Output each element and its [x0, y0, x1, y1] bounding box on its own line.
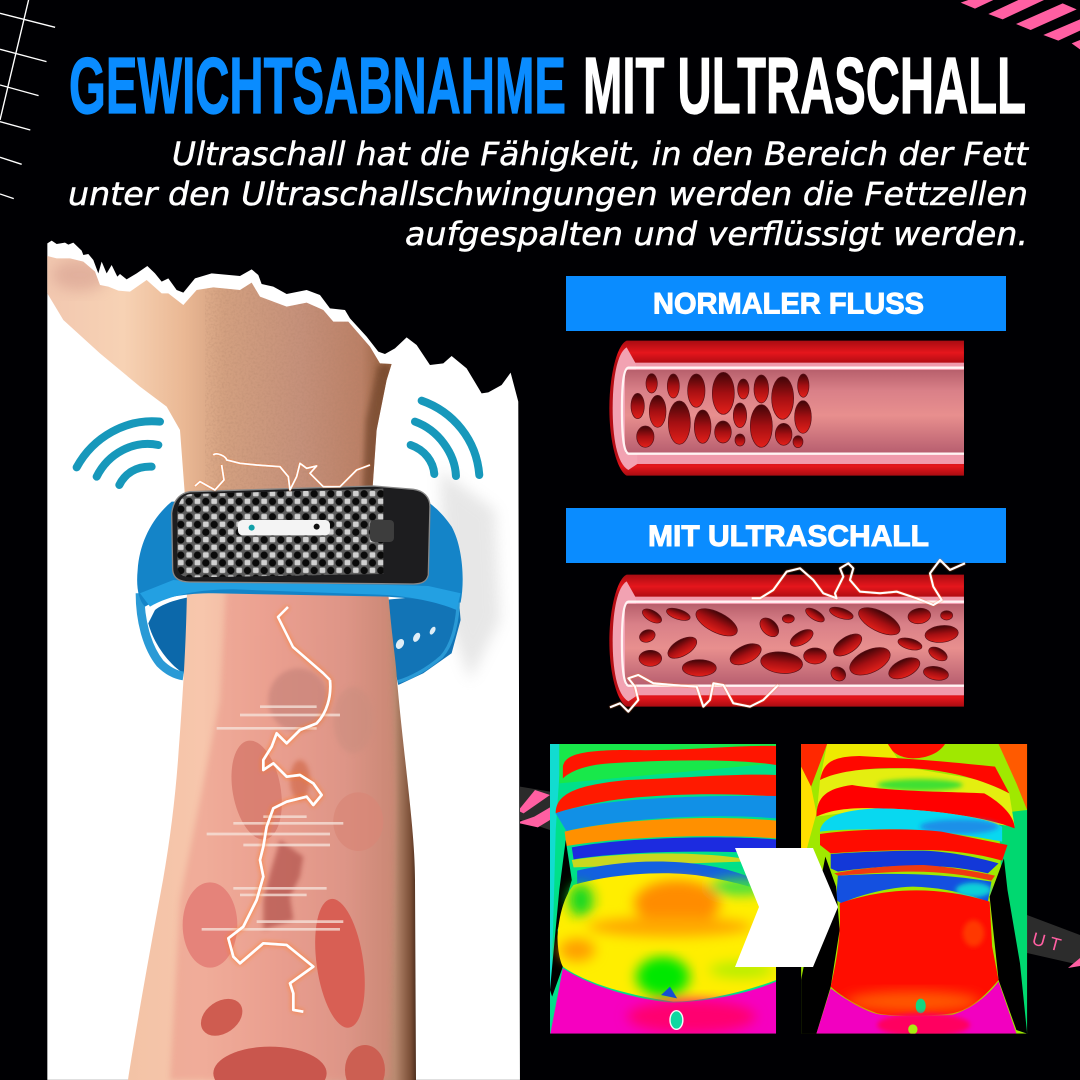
hip area [816, 982, 1016, 1034]
thermal image: after [801, 744, 1027, 1037]
lightning on forearm [228, 607, 330, 1012]
title: blue part: GEWICHTSABNAHME [69, 41, 566, 130]
hand and wrist [47, 256, 392, 497]
strap lower lip [140, 580, 461, 610]
hip area [550, 968, 776, 1034]
label: mit ultraschall [566, 508, 1006, 563]
subtitle text block [68, 135, 1029, 253]
label: normaler fluss: NORMALER FLUSS [653, 288, 924, 320]
wristband back strap [140, 593, 461, 685]
arrow: white chevron [735, 848, 838, 967]
black gaps [801, 857, 840, 1034]
wristband front [137, 486, 463, 610]
lightning on vessel [610, 560, 965, 712]
label: normaler fluss [566, 276, 1006, 331]
hand skin detail [52, 259, 395, 500]
decorative dark band with UT text: UT [1030, 929, 1068, 957]
belly [831, 890, 999, 1016]
thermal image: before [550, 744, 776, 1034]
side shadow [550, 840, 572, 997]
decorative dark band with UT text [1027, 915, 1080, 968]
vessel wall [609, 575, 964, 707]
subtitle text block: aufgespalten und verflüssigt werden. [405, 215, 1028, 253]
white pill [238, 520, 330, 535]
torso bands [559, 744, 776, 783]
vessel wall [609, 341, 964, 476]
icon: signal waves right [411, 401, 479, 476]
stretched blood cells [638, 602, 959, 684]
ultrasound scan lines [202, 707, 343, 929]
carbon pattern [177, 489, 383, 577]
blood vessel: normal flow [609, 341, 964, 476]
subtitle text block: unter den Ultraschallschwingungen werden die Fettzellen [68, 175, 1028, 213]
blood vessel: with ultrasound [609, 575, 964, 707]
square button [370, 520, 394, 542]
heat blobs [559, 878, 774, 997]
torn white paper [47, 241, 520, 1080]
forearm [120, 590, 420, 1080]
blood cells in the arm [183, 668, 385, 1080]
subtitle text block: Ultraschall hat die Fähigkeit, in den Bereich der Fett [172, 135, 1029, 173]
red blood cells [631, 372, 811, 448]
decorative pink stripes top right [961, 0, 1080, 49]
panel: wrist product photo [47, 241, 520, 1080]
belly [557, 873, 776, 1002]
decorative dark band with pink stripes middle left [520, 787, 550, 830]
band cast shadow [440, 470, 500, 680]
pill indicator dots [249, 525, 255, 531]
label: mit ultraschall: MIT ULTRASCHALL [648, 520, 929, 553]
decorative wireframe grid top left [0, 0, 55, 199]
strap sides [137, 502, 463, 607]
icon: signal waves left [77, 421, 160, 485]
title [69, 41, 1026, 130]
pink treatment overlay [170, 590, 396, 1080]
lightning above wristband [195, 454, 370, 490]
carbon face [172, 486, 430, 584]
